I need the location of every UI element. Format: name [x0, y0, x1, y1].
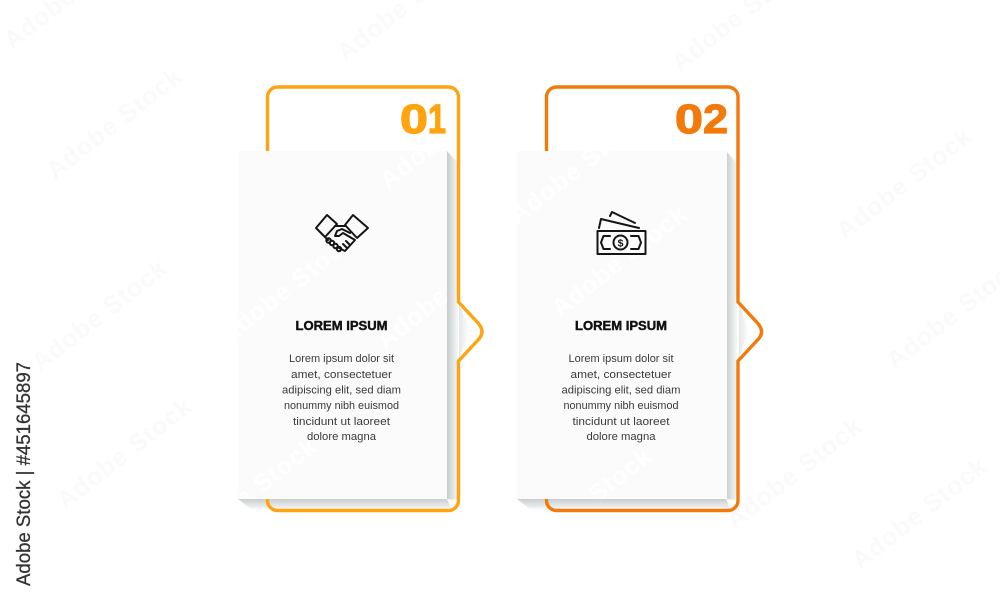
body text 01: adipiscing elit, sed diam — [282, 384, 401, 396]
body text 01: Lorem ipsum dolor sit — [289, 353, 394, 365]
dollar sign: $ — [618, 238, 624, 250]
card watermark 02: Adobe Stock — [546, 200, 693, 323]
orange outline 01 — [268, 87, 482, 510]
card watermark 01: Adobe Stock — [374, 72, 521, 195]
watermark background: Adobe Stock — [721, 412, 868, 535]
number 02 — [675, 96, 728, 142]
number 02: 2 — [703, 96, 728, 142]
card watermark 02 — [504, 107, 693, 565]
body text 01: dolore magna — [307, 431, 377, 443]
card watermark 01: Adobe Stock — [176, 432, 323, 555]
card 01 — [238, 151, 447, 499]
body text 01: amet, consectetuer — [291, 369, 392, 381]
body text 02 — [562, 353, 680, 443]
icon: handshake — [316, 215, 368, 251]
number 02: 0 — [675, 96, 703, 142]
orange outline 02 — [546, 87, 762, 510]
number 01: 0 — [400, 96, 428, 142]
card watermark 02: Adobe Stock — [504, 107, 651, 230]
card shadow 01 — [238, 151, 470, 510]
card watermark 01: Adobe Stock — [371, 232, 518, 355]
icon: money — [598, 212, 646, 254]
watermark background: Adobe Stock — [831, 122, 978, 245]
panel: step 02 — [517, 85, 764, 512]
body text 02: dolore magna — [586, 431, 656, 443]
card watermark 02: Adobe Stock — [511, 442, 658, 565]
number 01 — [400, 96, 446, 142]
body text 02: nonummy nibh euismod — [564, 400, 678, 412]
panel: step 01 — [238, 85, 484, 512]
card watermark 01 — [176, 72, 521, 555]
watermark background: Adobe Stock — [846, 452, 993, 575]
heading 01: LOREM IPSUM — [296, 318, 388, 333]
body text 01: tincidunt ut laoreet — [293, 416, 390, 428]
heading 02: LOREM IPSUM — [575, 318, 667, 333]
body text 02: adipiscing elit, sed diam — [562, 384, 680, 396]
body text 02: tincidunt ut laoreet — [572, 416, 670, 428]
card 02 — [517, 151, 727, 499]
stock id label: Adobe Stock | #451645897 — [14, 362, 35, 586]
watermark background: Adobe Stock — [26, 254, 173, 377]
watermark background: Adobe Stock — [41, 62, 188, 185]
body text 01 — [282, 353, 401, 443]
watermark background: Adobe Stock — [51, 392, 198, 515]
card shadow 02 — [517, 151, 749, 510]
number 01: 1 — [428, 96, 446, 142]
body text 02: Lorem ipsum dolor sit — [568, 353, 674, 365]
body text 02: amet, consectetuer — [570, 369, 672, 381]
body text 01: nonummy nibh euismod — [284, 400, 399, 412]
card watermark 01: Adobe Stock — [214, 227, 361, 350]
